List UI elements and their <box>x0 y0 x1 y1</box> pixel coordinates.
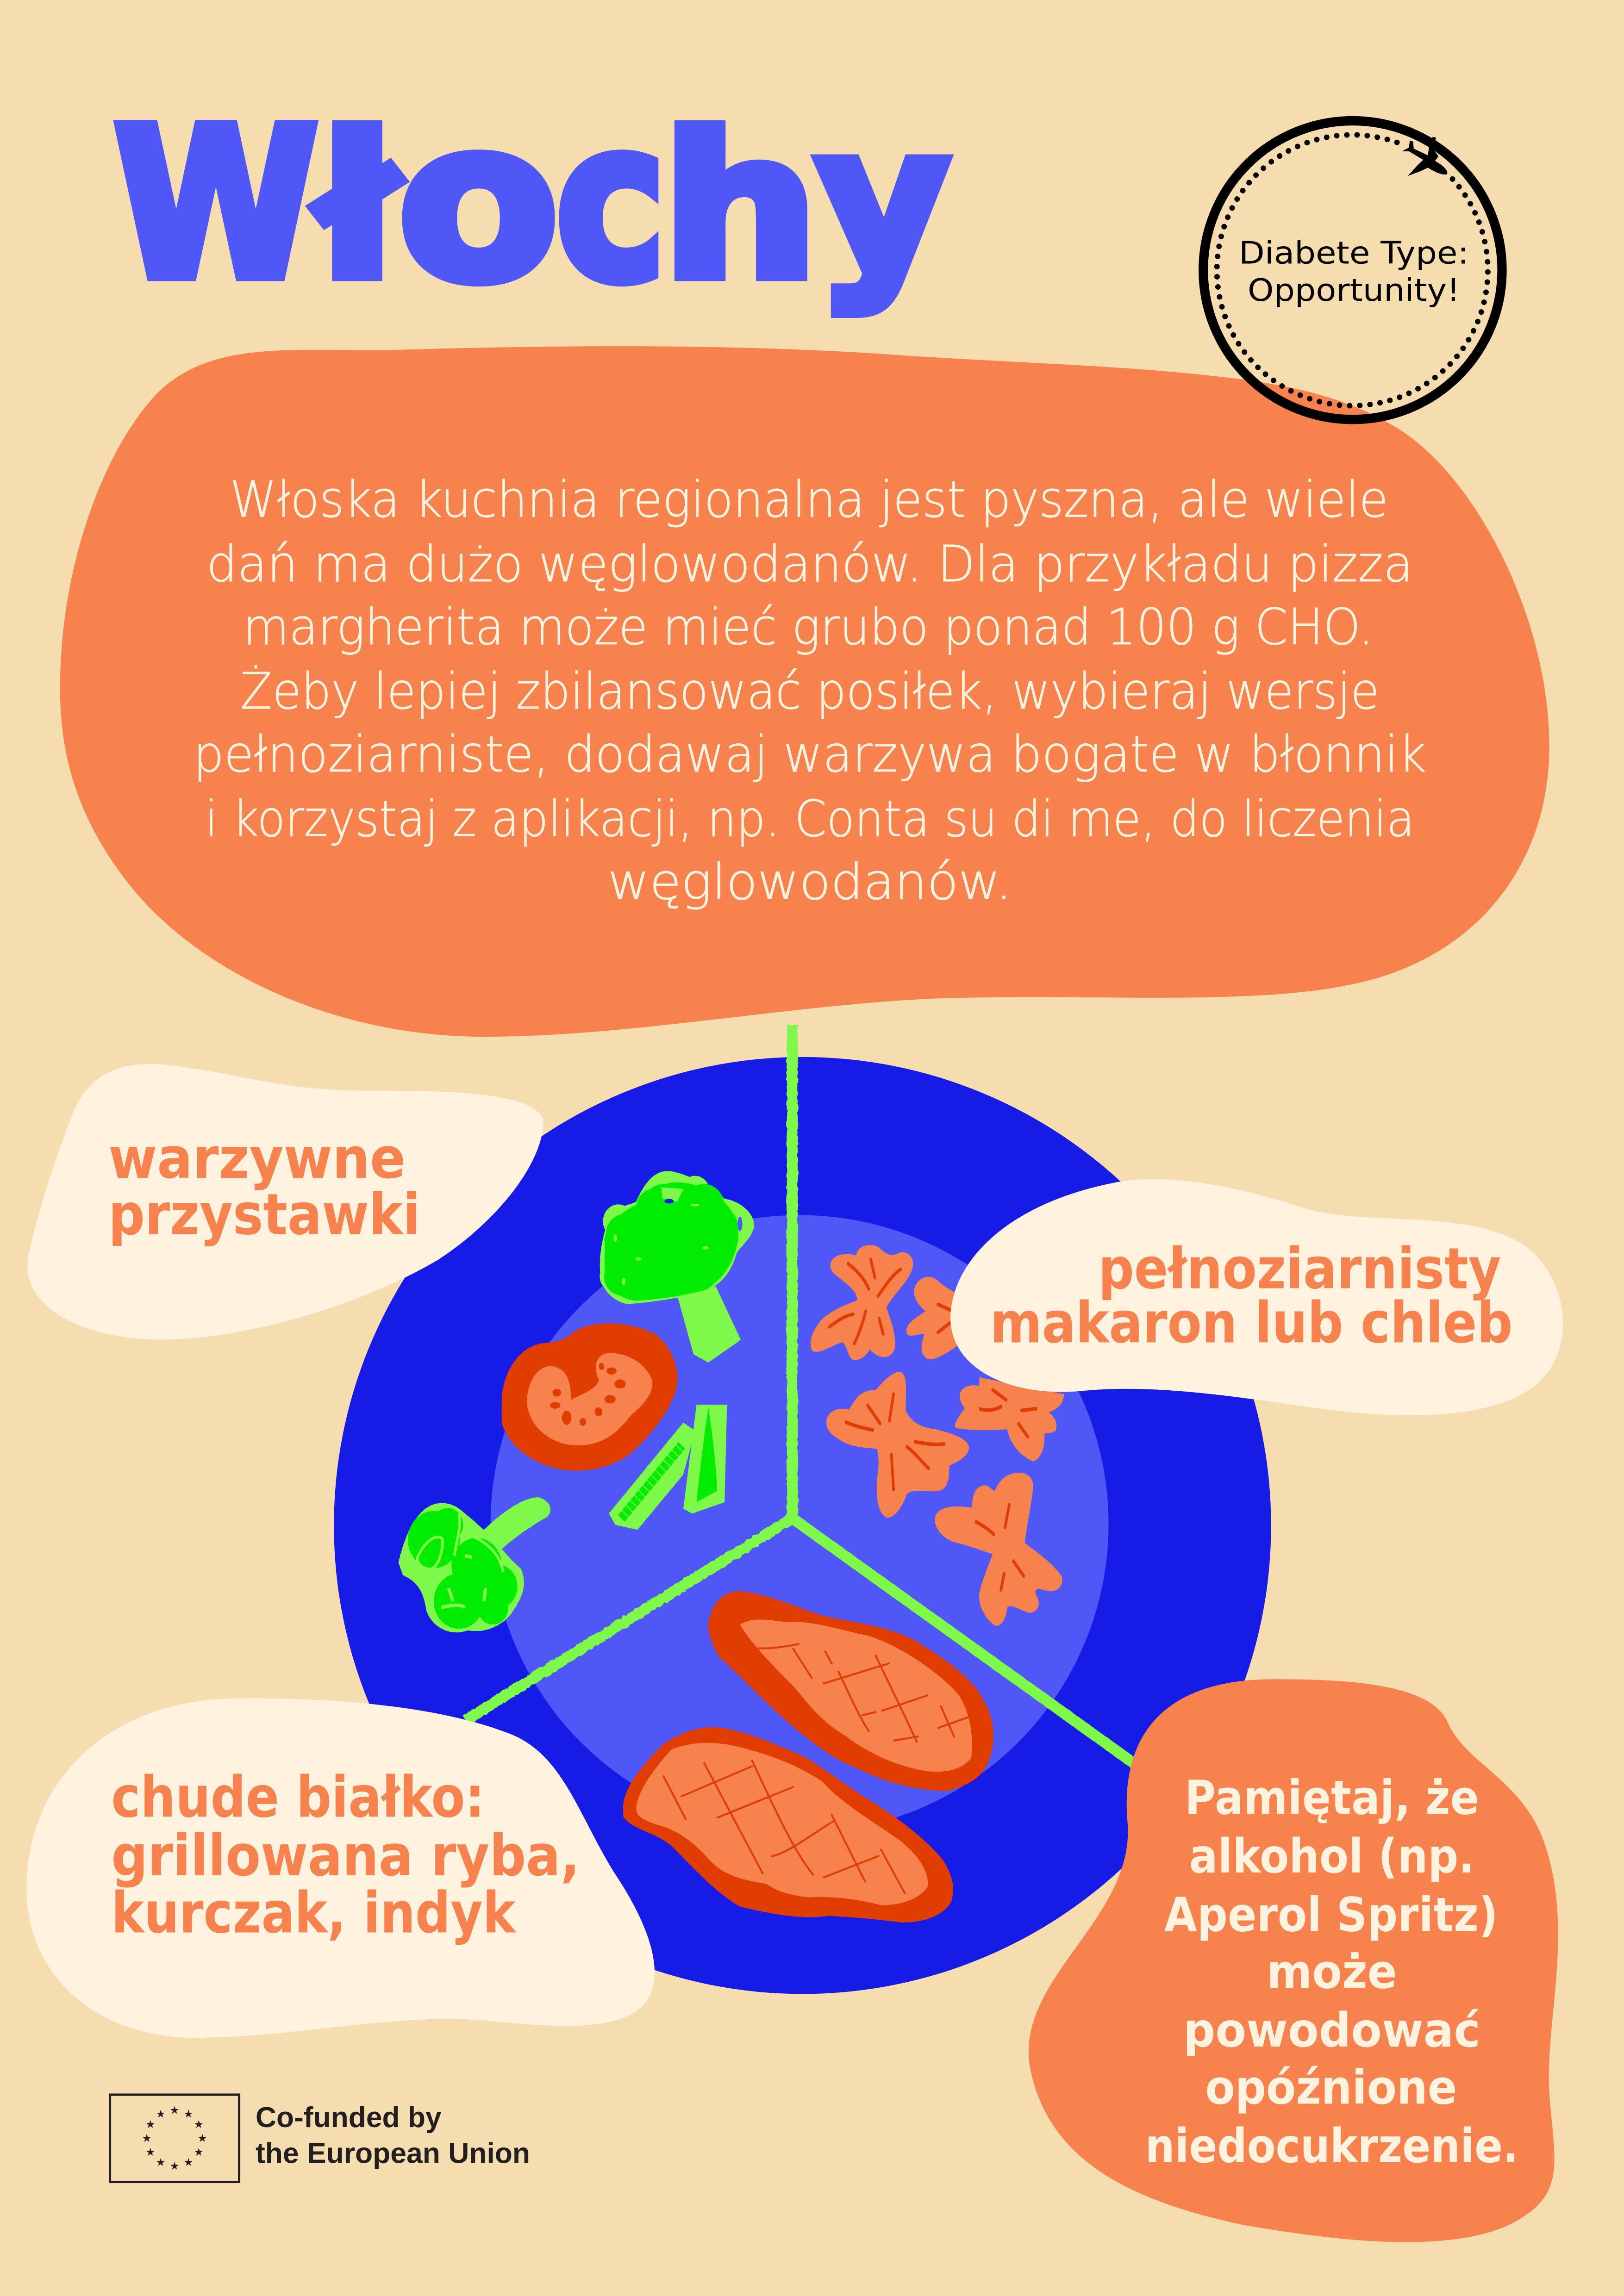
label text: grillowana ryba, <box>111 1823 580 1889</box>
icon: EU stars: ★ <box>198 2132 207 2145</box>
funding text: the European Union <box>256 2137 530 2169</box>
title: o <box>398 76 559 330</box>
intro text: węglowodanów. <box>608 853 1012 911</box>
label text <box>108 1126 420 1248</box>
panel: intro text blob <box>60 346 1549 1037</box>
callout text: powodować <box>1183 2003 1480 2058</box>
icon: EU stars: ★ <box>156 2108 166 2121</box>
icon: broccoli top <box>600 1171 754 1363</box>
label text: kurczak, indyk <box>111 1880 517 1946</box>
pasta bow 3 <box>826 1372 969 1518</box>
callout text: niedocukrzenie. <box>1145 2119 1518 2173</box>
panel: chude białko <box>26 1698 655 2038</box>
panel: pełnoziarnisty makaron lub chleb <box>950 1179 1563 1415</box>
intro text: Żeby lepiej zbilansować posiłek, wybieraj wersje <box>240 663 1380 721</box>
label text: makaron lub chleb <box>990 1290 1513 1356</box>
funding text <box>256 2102 530 2169</box>
callout text: alkohol (np. <box>1189 1829 1474 1884</box>
label text: przystawki <box>108 1182 420 1248</box>
food: grilled meat <box>623 1591 993 1923</box>
pasta bow 4 <box>955 1377 1064 1462</box>
stamp text: Opportunity! <box>1248 272 1460 308</box>
intro text: pełnoziarniste, dodawaj warzywa bogate w błonnik <box>194 726 1426 784</box>
intro text <box>194 471 1426 911</box>
intro text: margherita może mieć grubo ponad 100 g CHO. <box>243 598 1374 656</box>
icon: EU stars: ★ <box>145 2118 155 2131</box>
title: h <box>662 93 818 322</box>
icon: EU stars: ★ <box>145 2146 155 2159</box>
label text <box>111 1765 580 1946</box>
icon: broccoli bottom <box>399 1497 550 1632</box>
label text: warzywne <box>108 1126 406 1191</box>
icon: EU stars: ★ <box>142 2132 152 2145</box>
panel: alcohol callout <box>1029 1679 1558 2242</box>
EU co-funding logo <box>110 2095 530 2182</box>
pasta bow 5 <box>935 1473 1062 1626</box>
icon: green beans <box>609 1405 727 1530</box>
plate dividers <box>466 1025 1135 1764</box>
funding text: Co-funded by <box>256 2102 442 2134</box>
callout text: Pamiętaj, że <box>1185 1770 1479 1825</box>
callout text: opóźnione <box>1205 2060 1457 2115</box>
label text: chude białko: <box>111 1765 485 1830</box>
icon: tomato slice <box>502 1323 678 1471</box>
icon: EU stars: ★ <box>169 2104 180 2117</box>
icon: EU stars: ★ <box>183 2108 194 2121</box>
label text: pełnoziarnisty <box>1098 1236 1501 1302</box>
intro text: dań ma dużo węglowodanów. Dla przykładu pizza <box>206 535 1413 593</box>
icon: EU stars: ★ <box>183 2156 194 2169</box>
intro text: Włoska kuchnia regionalna jest pyszna, ale wiele <box>230 471 1388 529</box>
plate <box>334 1025 1271 1994</box>
grilled fillet upper <box>708 1591 993 1791</box>
grilled fillet lower <box>623 1727 953 1923</box>
food: vegetables <box>399 1171 754 1632</box>
title: W <box>114 86 318 324</box>
title: y <box>817 85 949 316</box>
title: c <box>556 76 666 330</box>
stamp text <box>1239 235 1469 308</box>
food: pasta <box>811 1245 1064 1626</box>
icon: EU stars <box>142 2104 207 2172</box>
intro text: i korzystaj z aplikacji, np. Conta su di me, do liczenia <box>205 790 1415 848</box>
callout text: może <box>1267 1945 1397 1999</box>
pasta bow 1 <box>811 1245 913 1360</box>
icon: EU stars: ★ <box>156 2156 166 2169</box>
icon: EU stars: ★ <box>169 2159 180 2172</box>
icon: airplane <box>1402 137 1447 176</box>
stamp badge <box>1203 121 1502 419</box>
stamp text: Diabete Type: <box>1239 235 1469 271</box>
label text <box>990 1236 1513 1356</box>
panel: warzywne przystawki <box>27 1064 543 1339</box>
pasta bow 2 <box>906 1277 956 1359</box>
callout text: Aperol Spritz) <box>1164 1887 1498 1942</box>
title: ł <box>311 93 401 322</box>
callout text <box>1145 1770 1518 2173</box>
icon: EU stars: ★ <box>194 2118 204 2131</box>
icon: EU stars: ★ <box>194 2146 204 2159</box>
